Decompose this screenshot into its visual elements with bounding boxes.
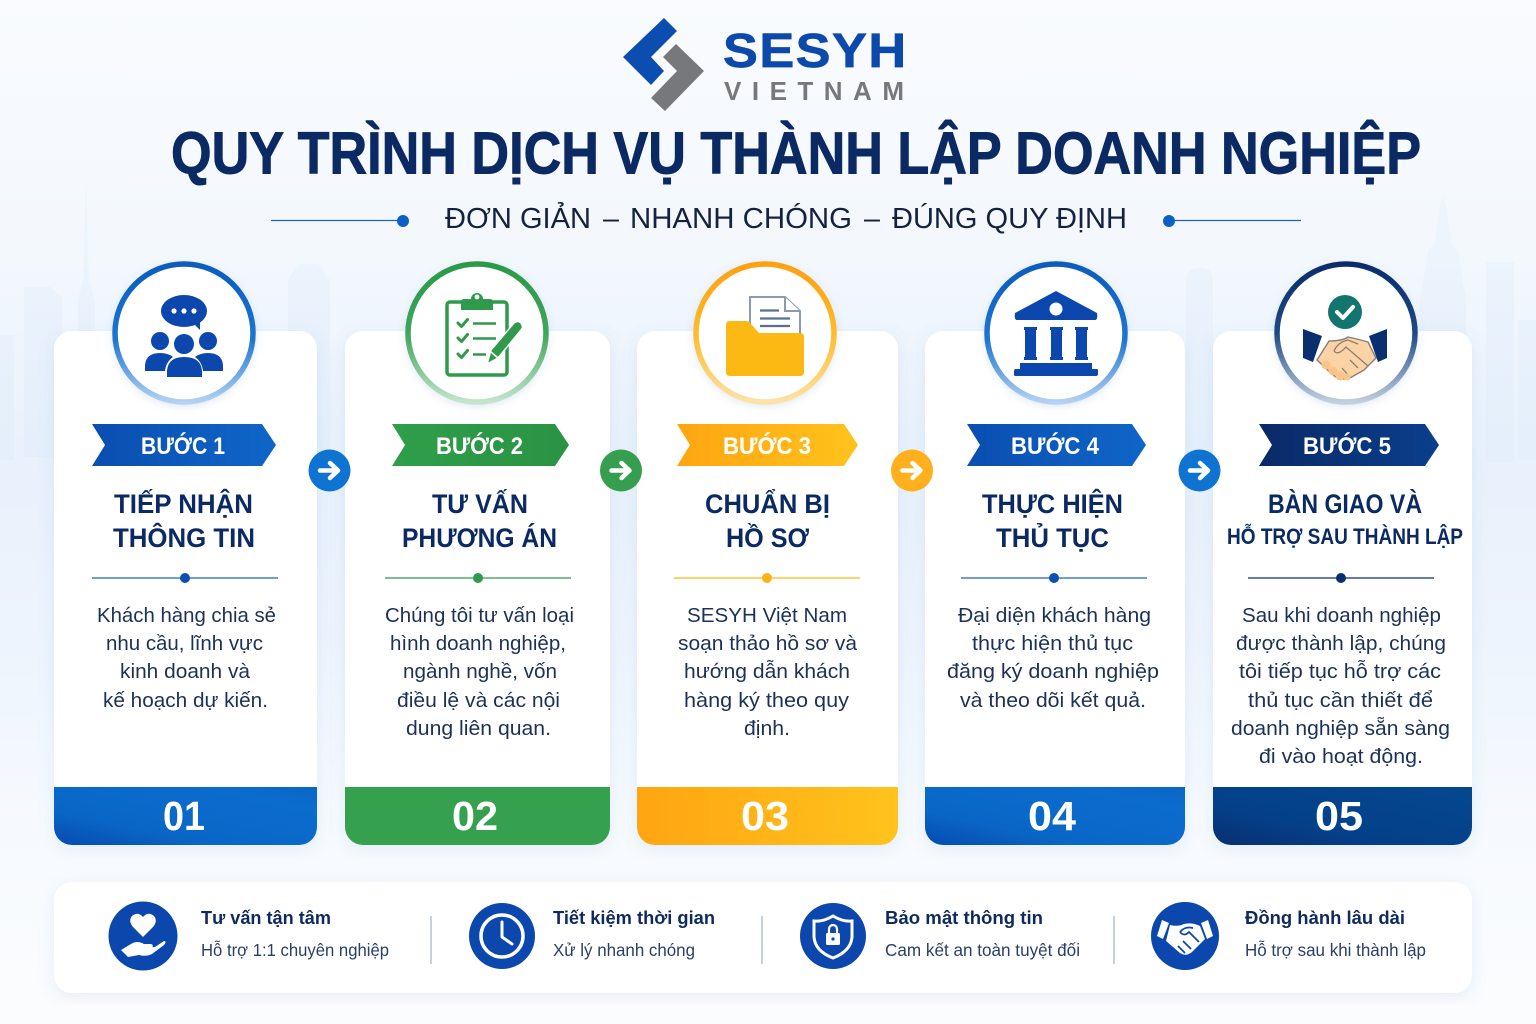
benefit: time saving: Tiết kiệm thời gian	[553, 907, 715, 928]
description: và theo dõi kết quả.	[960, 689, 1146, 712]
description	[1231, 604, 1450, 768]
divider	[1248, 573, 1434, 583]
benefit: dedicated advice: Tư vấn tận tâm	[201, 907, 331, 928]
divider	[92, 573, 278, 583]
panel: step 5	[1213, 264, 1472, 845]
icon: people with speech bubble	[115, 264, 253, 402]
description: doanh nghiệp sẵn sàng	[1231, 717, 1450, 740]
subtitle: –	[864, 203, 881, 235]
step badge	[92, 424, 276, 466]
benefit: long-term partnership: Đồng hành lâu dài	[1245, 907, 1405, 928]
step badge	[1259, 424, 1439, 466]
logo wordmark: VIETNAM	[724, 76, 904, 106]
description	[947, 604, 1159, 712]
benefit: data security	[800, 903, 1080, 969]
step badge	[967, 424, 1146, 466]
description: điều lệ và các nội	[397, 689, 560, 712]
description: được thành lập, chúng	[1236, 632, 1446, 655]
panel: step 1	[54, 264, 317, 845]
description: thực hiện thủ tục	[972, 632, 1133, 655]
card body	[925, 331, 1185, 845]
benefit: data security: Bảo mật thông tin	[885, 907, 1043, 928]
panel: step 2	[345, 264, 610, 845]
logo wordmark: SESYH	[723, 24, 906, 78]
subtitle	[271, 201, 1301, 235]
benefit: dedicated advice	[108, 902, 389, 970]
icon: government building	[987, 264, 1125, 402]
heading	[705, 488, 830, 553]
number bar	[637, 787, 898, 845]
divider	[385, 573, 571, 583]
icon: shield with lock	[800, 903, 866, 969]
description: Chúng tôi tư vấn loại	[385, 604, 574, 627]
panel: step 3	[637, 264, 898, 845]
benefit: dedicated advice: Hỗ trợ 1:1 chuyên nghiệp	[201, 939, 389, 960]
description: dung liên quan.	[406, 717, 551, 740]
icon: folder with document	[696, 264, 834, 402]
number bar: 01	[163, 793, 205, 839]
card body	[637, 331, 898, 845]
number bar: 02	[452, 793, 498, 839]
number bar: 04	[1028, 793, 1076, 839]
card body	[345, 331, 610, 845]
description: đi vào hoạt động.	[1259, 745, 1423, 768]
strip background	[54, 882, 1472, 993]
subtitle: NHANH CHÓNG	[630, 202, 852, 235]
panel: step 4	[925, 264, 1185, 845]
icon: heart in hand	[108, 902, 178, 970]
heading: CHUẨN BỊ	[705, 488, 830, 519]
number bar: 03	[741, 793, 789, 839]
benefit: time saving	[469, 903, 715, 969]
heading	[1227, 488, 1463, 549]
description: đăng ký doanh nghiệp	[947, 660, 1159, 683]
heading: THỦ TỤC	[996, 521, 1109, 553]
step badge: BƯỚC 5	[1303, 432, 1391, 460]
logo wordmark	[723, 24, 906, 106]
logo mark	[623, 18, 704, 111]
description: hình doanh nghiệp,	[390, 632, 566, 655]
description: ngành nghề, vốn	[403, 660, 557, 683]
step badge: BƯỚC 2	[436, 432, 523, 460]
logo	[623, 18, 906, 111]
description	[97, 604, 276, 712]
heading	[982, 488, 1123, 553]
description: thủ tục cần thiết để	[1248, 689, 1433, 712]
description: hàng ký theo quy	[684, 689, 850, 712]
description: Sau khi doanh nghiệp	[1242, 604, 1441, 627]
heading: HỖ TRỢ SAU THÀNH LẬP	[1227, 523, 1463, 549]
description	[678, 604, 858, 740]
heading: PHƯƠNG ÁN	[402, 522, 557, 553]
heading: TƯ VẤN	[432, 488, 528, 519]
heading: HỒ SƠ	[726, 522, 809, 553]
benefit: data security: Cam kết an toàn tuyệt đối	[885, 940, 1080, 960]
heading: TIẾP NHẬN	[114, 488, 253, 519]
step badge: BƯỚC 4	[1011, 432, 1100, 460]
number bar	[345, 787, 610, 845]
subtitle: ĐÚNG QUY ĐỊNH	[892, 202, 1127, 235]
panel: benefits strip	[54, 882, 1472, 993]
subtitle: ĐƠN GIẢN	[445, 201, 591, 235]
description: kế hoạch dự kiến.	[103, 689, 268, 712]
heading: THÔNG TIN	[113, 522, 255, 553]
arrow 2	[600, 450, 642, 492]
heading	[402, 488, 557, 553]
icon: handshake with check	[1277, 264, 1415, 402]
description: soạn thảo hồ sơ và	[678, 632, 858, 655]
card body	[54, 331, 317, 845]
benefit: time saving: Xử lý nhanh chóng	[553, 940, 695, 960]
divider	[674, 573, 860, 583]
arrow 3	[891, 450, 933, 492]
step badge	[392, 424, 569, 466]
description: SESYH Việt Nam	[687, 604, 847, 627]
heading	[113, 488, 255, 553]
card body	[1213, 331, 1472, 845]
step badge: BƯỚC 1	[141, 432, 225, 460]
divider	[961, 573, 1147, 583]
description: Đại diện khách hàng	[958, 604, 1151, 627]
icon: handshake	[1151, 902, 1219, 970]
number bar: 05	[1315, 793, 1363, 839]
number bar	[1213, 787, 1472, 845]
step badge: BƯỚC 3	[723, 432, 811, 460]
number bar	[925, 787, 1185, 845]
heading: BÀN GIAO VÀ	[1268, 488, 1422, 519]
heading: THỰC HIỆN	[982, 488, 1123, 519]
benefit: long-term partnership: Hỗ trợ sau khi thành lập	[1245, 939, 1426, 960]
description: kinh doanh và	[120, 660, 251, 683]
description: nhu cầu, lĩnh vực	[106, 632, 263, 655]
step badge	[677, 424, 858, 466]
benefit: long-term partnership	[1151, 902, 1426, 970]
description: hướng dẫn khách	[684, 660, 850, 683]
number bar	[54, 787, 317, 845]
description: Khách hàng chia sẻ	[97, 604, 276, 627]
description: định.	[744, 717, 790, 740]
description: tôi tiếp tục hỗ trợ các	[1239, 660, 1441, 683]
description	[385, 604, 574, 740]
subtitle: –	[603, 203, 620, 235]
arrow 1	[308, 450, 350, 492]
icon: clock	[469, 903, 535, 969]
arrow 4	[1178, 450, 1220, 492]
icon: clipboard and pencil	[408, 264, 546, 402]
